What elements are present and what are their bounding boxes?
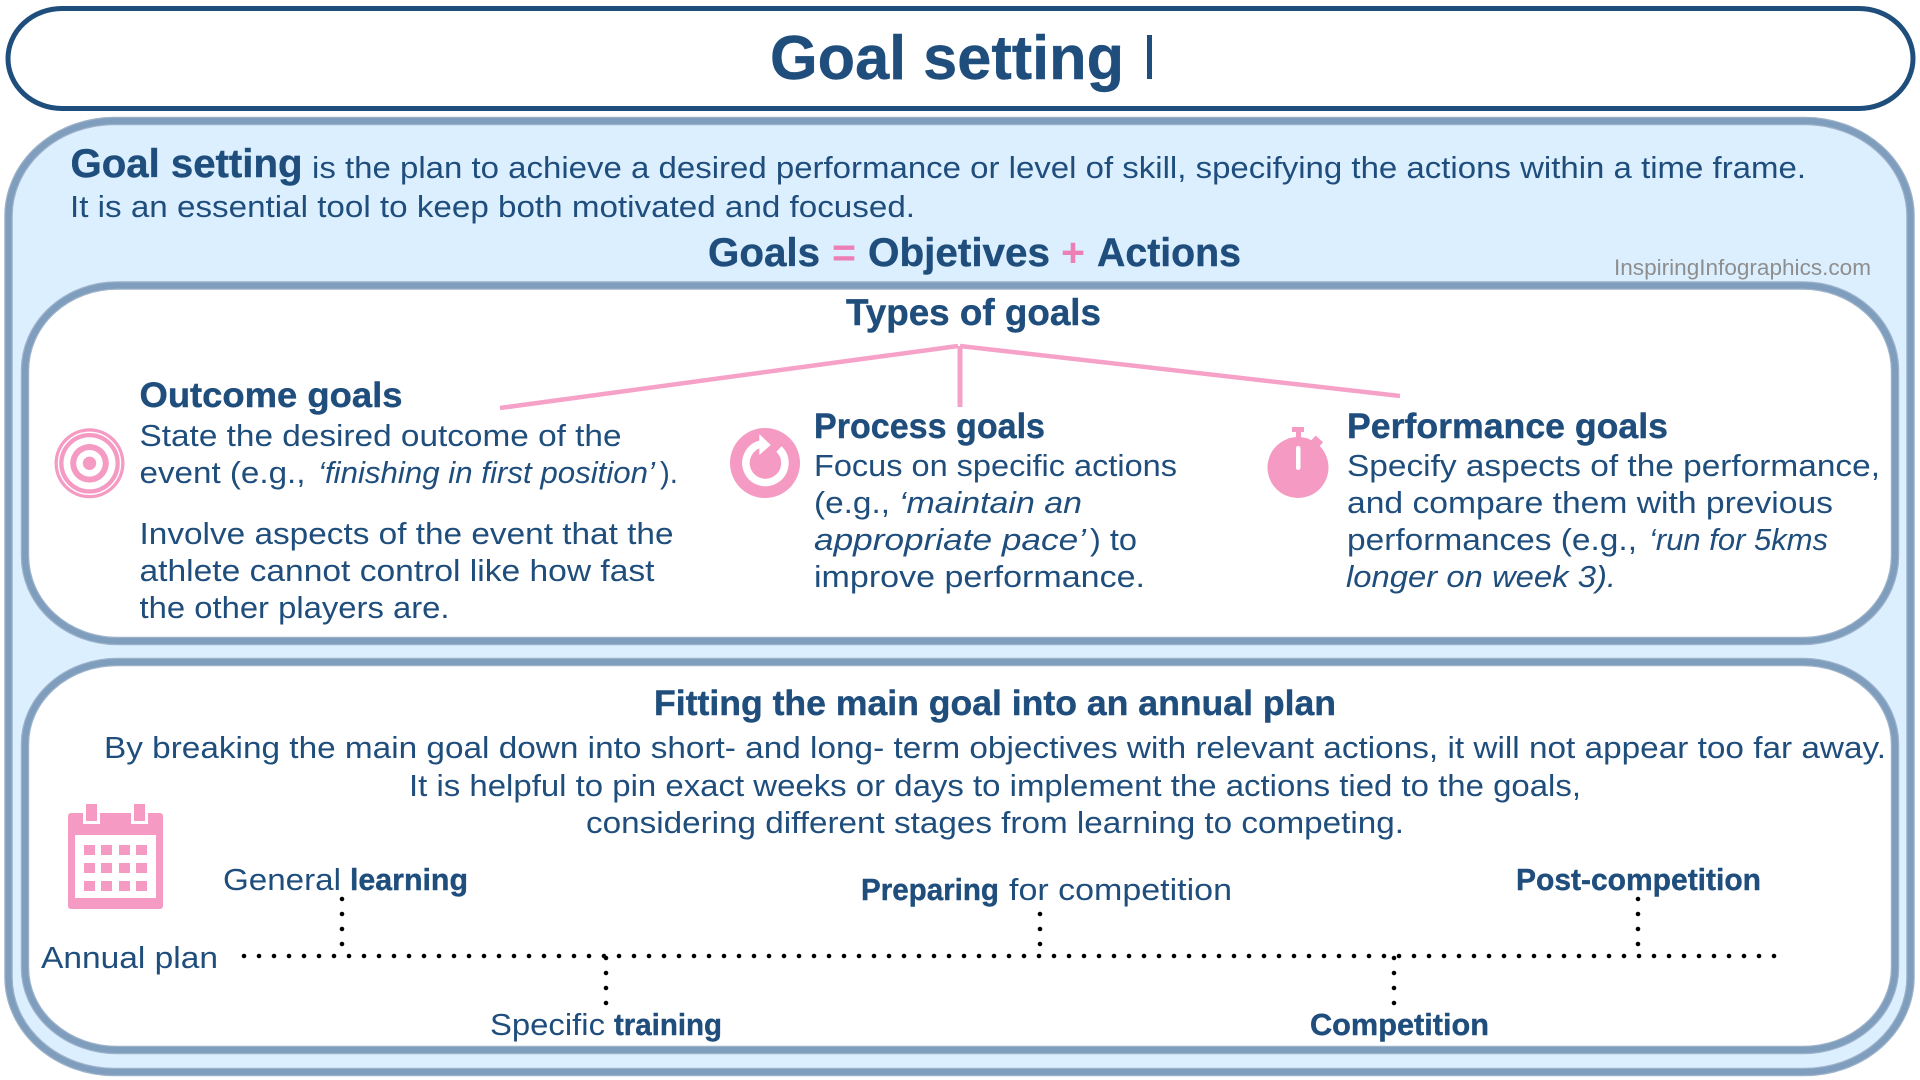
stage: specific training — [490, 958, 722, 1042]
equation: goals = objectives + actions: Goals — [708, 231, 820, 275]
text block: annual plan description — [104, 730, 1886, 840]
heading: fitting the main goal: Fitting the main goal into an annual plan — [654, 684, 1336, 723]
equation: goals = objectives + actions: Actions — [1097, 231, 1241, 275]
text block: annual plan description: considering different stages from learning to competing. — [586, 805, 1404, 840]
text block: process goals — [814, 407, 1177, 594]
text block: process goals: Process goals — [814, 407, 1045, 446]
equation: goals = objectives + actions: = — [832, 231, 856, 275]
text block: performance goals: performances (e.g., — [1347, 522, 1637, 557]
text block: annual plan description: It is helpful to pin exact weeks or days to implement the actions tied to the goals, — [409, 768, 1581, 803]
text block: performance goals: longer on week 3). — [1346, 559, 1616, 594]
stage: general learning: learning — [350, 862, 468, 897]
icon: process arrow — [730, 428, 800, 498]
stage: preparing for competition — [861, 872, 1232, 945]
equation: goals = objectives + actions: Objetives — [868, 231, 1050, 275]
text block: performance goals: Specify aspects of the performance, — [1347, 448, 1880, 483]
panel: annual plan — [25, 662, 1895, 1050]
text block: process goals: ‘maintain an — [899, 485, 1082, 520]
text block: outcome goals: Outcome goals — [140, 376, 402, 415]
watermark: InspiringInfographics.com — [1614, 255, 1871, 280]
equation: goals = objectives + actions — [708, 231, 1241, 275]
stage: specific training: Specific — [490, 1007, 605, 1042]
stage: preparing for competition: for competition — [1009, 872, 1232, 907]
stage: specific training: training — [614, 1007, 722, 1042]
connector: tree branches — [500, 346, 1400, 408]
text block: process goals: (e.g., — [814, 485, 890, 520]
definition text: is the plan to achieve a desired performance or level of skill, specifying the actions within a time frame. — [312, 150, 1806, 185]
text block: process goals: improve performance. — [814, 559, 1145, 594]
definition text — [70, 142, 1806, 224]
text block: outcome goals — [140, 376, 678, 625]
label: annual plan: Annual plan — [41, 940, 218, 975]
stage: preparing for competition: Preparing — [861, 872, 999, 907]
timeline: dotted line — [244, 954, 1776, 958]
text block: performance goals: ‘run for 5kms — [1649, 522, 1828, 557]
equation: goals = objectives + actions: + — [1061, 231, 1085, 275]
text block: process goals: ) to — [1090, 522, 1137, 557]
title box — [8, 8, 1913, 108]
text block: outcome goals: athlete cannot control like how fast — [140, 553, 655, 588]
icon: target — [54, 428, 124, 498]
text block: performance goals: and compare them with previous — [1347, 485, 1833, 520]
stage: post-competition: Post-competition — [1516, 862, 1761, 897]
text block: annual plan description: By breaking the main goal down into short- and long- term objectives with relevant actions, it will not appear too far away. — [104, 730, 1886, 765]
definition text: Goal setting — [70, 142, 302, 186]
heading: types of goals: Types of goals — [846, 292, 1101, 333]
text block: outcome goals: Involve aspects of the event that the — [140, 516, 674, 551]
stage: competition: Competition — [1310, 1007, 1489, 1042]
text block: outcome goals: event (e.g., — [140, 455, 306, 490]
text block: performance goals: Performance goals — [1347, 407, 1668, 446]
title: Goal setting — [770, 24, 1124, 93]
text block: outcome goals: State the desired outcome of the — [140, 418, 622, 453]
panel: types of goals — [25, 286, 1895, 641]
text block: outcome goals: ‘finishing in first position’ — [318, 455, 656, 490]
stage: general learning: General — [223, 862, 341, 897]
text block: performance goals — [1346, 407, 1880, 594]
text block: process goals: appropriate pace’ — [814, 522, 1087, 557]
definition text: It is an essential tool to keep both motivated and focused. — [70, 189, 915, 224]
stage: general learning — [223, 862, 468, 945]
text block: outcome goals: the other players are. — [140, 590, 450, 625]
icon: calendar — [68, 802, 163, 909]
text block: process goals: Focus on specific actions — [814, 448, 1177, 483]
text block: outcome goals: ). — [660, 455, 678, 490]
icon: stopwatch — [1268, 427, 1328, 498]
